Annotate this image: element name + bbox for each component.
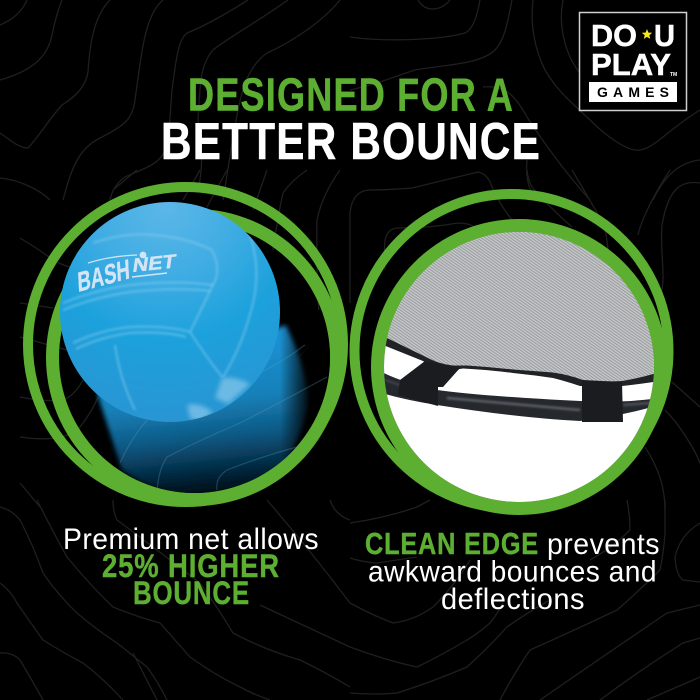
tube highlights [385,380,650,410]
text block: right caption: CLEAN EDGE [365,526,539,561]
logo: Do U Play Games [580,12,686,110]
green outer ring left [28,187,343,502]
net binding [380,336,660,386]
logo: Do U Play Games: DO [591,18,637,53]
text block: left caption: 25% HIGHER [102,548,280,584]
black strap right [582,380,623,422]
text block: left caption: BOUNCE [133,575,250,611]
light patches on ball [187,378,250,422]
logo: Do U Play Games: U [654,18,675,53]
text block: right caption [365,526,660,616]
green inner ring right [371,219,667,515]
text block: right caption: prevents [547,528,660,561]
black strap left [398,361,460,406]
text block: right caption: deflections [441,583,585,616]
BASHNET logo on ball: BASH [77,253,130,298]
logo: Do U Play Games: TM [670,72,677,78]
green outer ring right [354,194,668,508]
logo: Do U Play Games: GAMES [597,84,669,100]
blue volleyball [60,202,280,422]
panel: net edge [354,194,668,515]
net and frame photo [378,225,660,502]
text block: left caption: Premium net allows [63,523,319,556]
logo: Do U Play Games: PLAY [591,47,671,82]
title: BETTER BOUNCE [161,113,541,171]
text block: right caption: awkward bounces and [368,556,657,588]
title: DESIGNED FOR A [188,68,514,120]
grey mesh net [380,225,660,381]
text block: left caption [63,523,319,611]
ball motion trail [97,310,330,500]
title [161,68,541,171]
BASHNET logo on ball: NET [131,251,177,277]
round frame tube [378,370,652,421]
panel: ball with bounce trail [28,187,343,506]
green inner ring left [46,209,343,506]
